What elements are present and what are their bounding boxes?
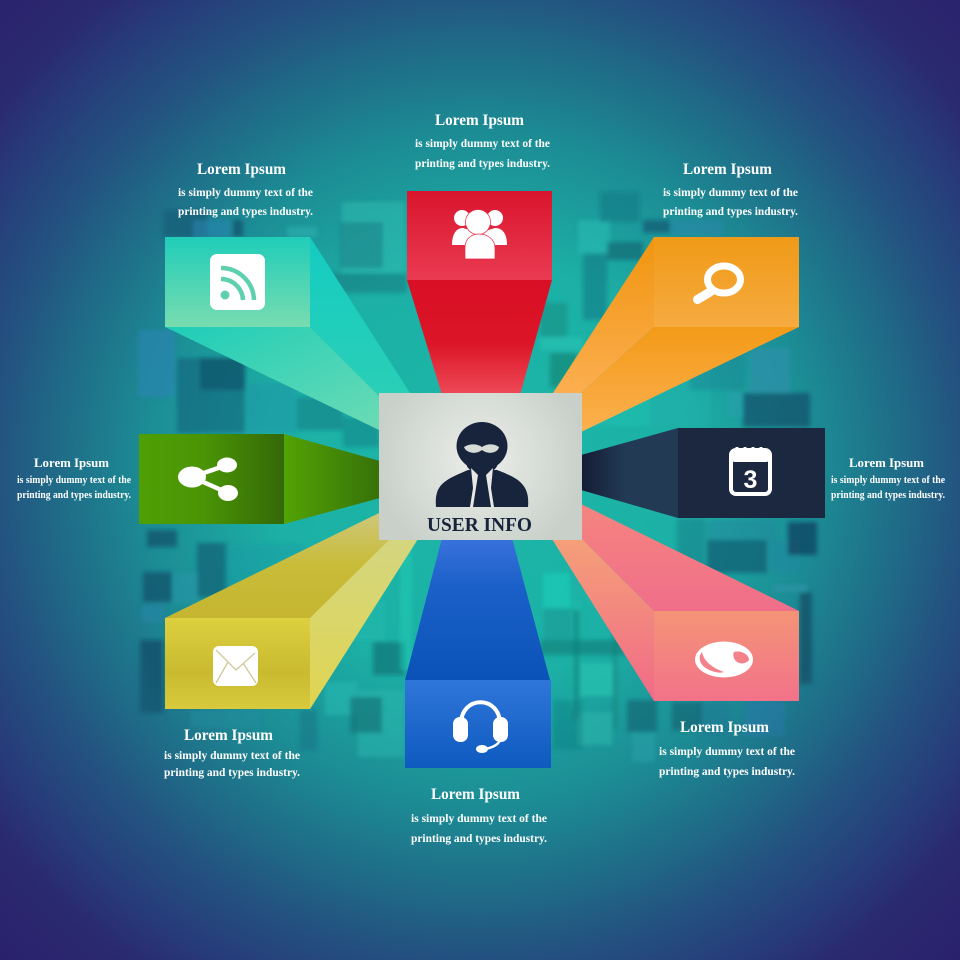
user info label: USER INFO <box>427 514 532 536</box>
text: blue block caption: Lorem Ipsum <box>431 786 521 803</box>
text: blue block caption <box>411 786 547 845</box>
text: teal block caption <box>178 161 313 218</box>
icon: headset <box>453 702 508 753</box>
text: navy block caption: Lorem Ipsum <box>849 455 924 470</box>
icon: calendar <box>731 447 770 494</box>
text: navy block caption: is simply dummy text of the <box>831 475 946 486</box>
text: orange block caption: is simply dummy text of the <box>663 187 798 199</box>
text: orange block caption: Lorem Ipsum <box>683 161 773 178</box>
text: orange block caption: printing and types industry. <box>663 206 798 218</box>
panel: blue block <box>405 538 551 768</box>
text: blue block caption: is simply dummy text of the <box>411 813 547 825</box>
text: green block caption <box>17 455 132 501</box>
panel: navy block <box>581 428 825 518</box>
text: navy block caption <box>831 455 946 501</box>
panel: yellow block <box>165 513 418 709</box>
text: yellow block caption: printing and types industry. <box>164 767 300 779</box>
icon: calendar: 3 <box>744 466 757 494</box>
text: blue block caption: printing and types industry. <box>411 833 547 845</box>
panel: green block <box>139 434 380 524</box>
text: teal block caption: printing and types industry. <box>178 206 313 218</box>
text: yellow block caption: is simply dummy text of the <box>164 750 300 762</box>
icon: people <box>452 210 507 259</box>
text: green block caption: Lorem Ipsum <box>34 455 109 470</box>
text: navy block caption: printing and types industry. <box>831 490 945 501</box>
text: red block caption: is simply dummy text of the <box>415 138 550 150</box>
text: pink block caption <box>659 719 795 778</box>
text: green block caption: printing and types industry. <box>17 490 131 501</box>
text: red block caption <box>415 112 550 170</box>
icon: envelope <box>213 646 258 686</box>
icon: globe <box>695 642 753 678</box>
text: pink block caption: Lorem Ipsum <box>680 719 770 736</box>
background blurred squares <box>138 192 817 762</box>
icon: share <box>178 458 238 501</box>
text: teal block caption: Lorem Ipsum <box>197 161 287 178</box>
text: yellow block caption: Lorem Ipsum <box>184 727 274 744</box>
panel: orange block <box>553 237 799 432</box>
text: orange block caption <box>663 161 798 218</box>
text: yellow block caption <box>164 727 300 779</box>
panel: user info <box>379 393 582 540</box>
panel: pink block <box>552 504 799 701</box>
text: green block caption: is simply dummy text of the <box>17 475 132 486</box>
text: red block caption: Lorem Ipsum <box>435 112 525 129</box>
text: pink block caption: printing and types industry. <box>659 766 795 778</box>
panel: teal block <box>165 237 410 430</box>
text: red block caption: printing and types industry. <box>415 158 550 170</box>
text: teal block caption: is simply dummy text of the <box>178 187 313 199</box>
icon: rss <box>210 254 265 310</box>
icon: user silhouette <box>436 422 528 507</box>
text: pink block caption: is simply dummy text of the <box>659 746 795 758</box>
icon: magnifier <box>698 266 740 300</box>
panel: red block <box>407 191 552 395</box>
